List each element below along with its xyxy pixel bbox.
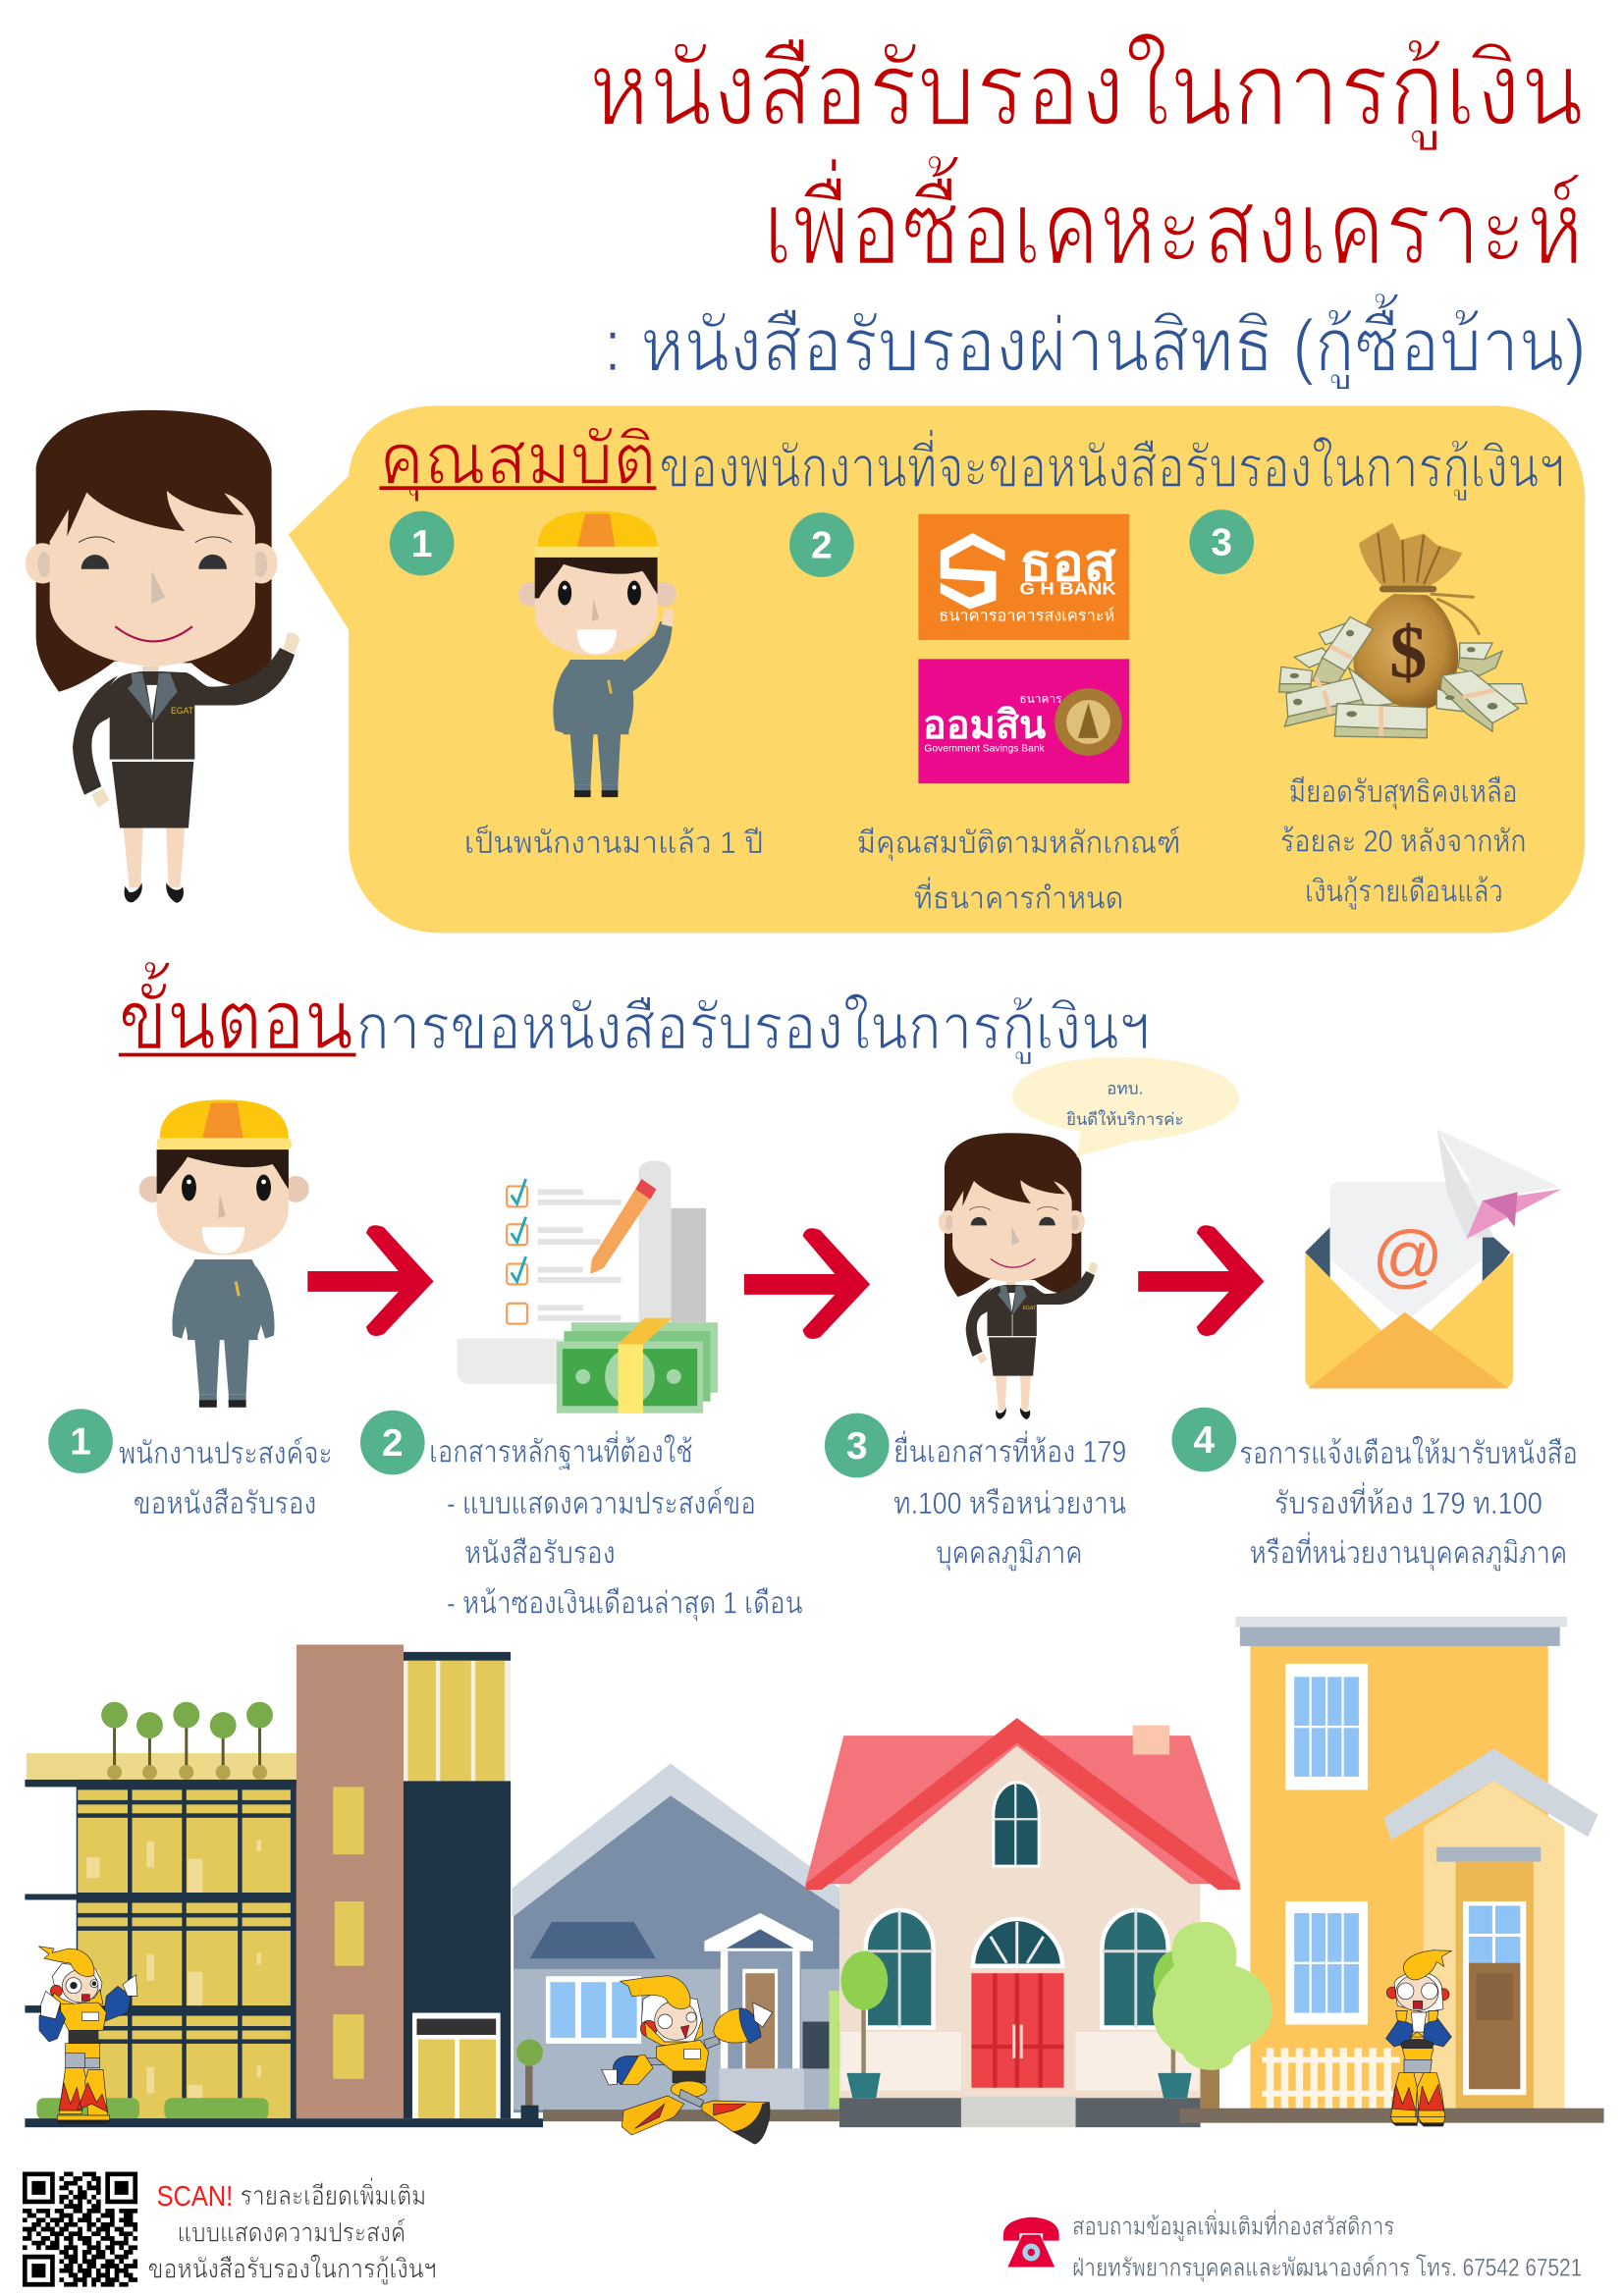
number badge 3: 3 (1211, 521, 1232, 563)
icon: worker waving (518, 511, 676, 797)
mascot left (38, 1947, 137, 2123)
step 3 (825, 1414, 1126, 1573)
text: criterion 2 (857, 826, 1180, 916)
text: criterion 3 (1280, 774, 1527, 909)
text: criterion 2: มีคุณสมบัติตามหลักเกณฑ์ (857, 826, 1180, 862)
step 4: รับรองที่ห้อง 179 ท.100 (1274, 1481, 1542, 1521)
mascot right (1386, 1950, 1451, 2126)
step 3: ยื่นเอกสารที่ห้อง 179 (893, 1430, 1126, 1469)
panel: qualifications (289, 405, 1585, 933)
arrow 2 (744, 1228, 870, 1339)
step 3: บุคคลภูมิภาค (936, 1536, 1082, 1573)
step 2 (360, 1411, 803, 1622)
step 4: หรือที่หน่วยงานบุคคลภูมิภาค (1250, 1531, 1567, 1573)
text: scan prompt: รายละเอียดเพิ่มเติม (241, 2177, 426, 2211)
arrow 1 (307, 1225, 434, 1336)
text: criterion 1: เป็นพนักงานมาแล้ว 1 ปี (464, 824, 763, 860)
text: contact: สอบถามข้อมูลเพิ่มเติมที่กองสวัสดิการ (1072, 2210, 1394, 2242)
text: criterion 3: ร้อยละ 20 หลังจากหัก (1280, 825, 1527, 859)
text: scan prompt: SCAN! (157, 2181, 233, 2213)
logo: Government Savings Bank: ออมสิน (923, 703, 1047, 747)
heading: steps (119, 961, 1150, 1066)
text: criterion 2: ที่ธนาคารกำหนด (914, 877, 1123, 916)
logo: Government Savings Bank: Government Savings Bank (924, 743, 1045, 754)
text: criterion 3: มียอดรับสุทธิคงเหลือ (1289, 774, 1518, 811)
building: glass office (25, 1644, 543, 2127)
heading: steps: ขั้นตอน (119, 961, 353, 1066)
arrow 3 (1138, 1225, 1264, 1336)
icon: envelope and paper plane (1305, 1129, 1561, 1388)
step 2: เอกสารหลักฐานที่ต้องใช้ (429, 1430, 693, 1470)
step 2: - แบบแสดงความประสงค์ขอ (447, 1486, 756, 1521)
step 1 (48, 1409, 333, 1521)
building: yellow house (1153, 1617, 1604, 2123)
step 3: 3 (846, 1425, 868, 1468)
logo: Government Savings Bank (918, 659, 1129, 783)
number badge 1 (390, 511, 454, 575)
step 1: พนักงานประสงค์จะ (119, 1436, 333, 1470)
icon: documents and money (457, 1160, 718, 1414)
logo: GH Bank: G H BANK (1019, 579, 1116, 599)
logo: GH Bank: ธนาคารอาคารสงเคราะห์ (939, 607, 1114, 625)
step 2: 2 (382, 1422, 404, 1465)
title (589, 32, 1584, 287)
step 1: 1 (70, 1420, 91, 1463)
illustration: street of houses (25, 1617, 1604, 2144)
text: scan prompt: ขอหนังสือรับรองในการกู้เงินฯ (148, 2254, 437, 2285)
building: grey house (513, 1763, 839, 2121)
text: scan prompt (148, 2177, 437, 2285)
speech bubble (1012, 1057, 1239, 1157)
number badge 2: 2 (811, 524, 833, 566)
building: red roof house (806, 1718, 1240, 2127)
heading: qualifications (379, 420, 1564, 502)
number badge 3 (1189, 509, 1254, 574)
heading: qualifications: คุณสมบัติ (379, 420, 656, 502)
number badge 2 (789, 512, 854, 577)
text: contact (1072, 2210, 1582, 2282)
step 2: - หน้าซองเงินเดือนล่าสุด 1 เดือน (447, 1585, 803, 1622)
speech bubble: ยินดีให้บริการค่ะ (1066, 1109, 1183, 1129)
icon: money bag (1279, 523, 1527, 738)
logo: Government Savings Bank: ธนาคาร (1019, 692, 1062, 706)
speech panel background (289, 405, 1585, 933)
character: woman presenter (26, 410, 299, 903)
speech bubble: อทบ. (1107, 1078, 1143, 1097)
character: woman service (939, 1133, 1098, 1419)
icon: worker step 1 (139, 1099, 309, 1408)
logo: GH Bank (918, 514, 1129, 640)
buildings row (25, 1617, 1604, 2127)
number badge 1: 1 (411, 523, 432, 565)
text: criterion 3: เงินกู้รายเดือนแล้ว (1305, 874, 1503, 909)
icon: money bag: $ (1389, 611, 1428, 694)
text: scan prompt: แบบแสดงความประสงค์ (178, 2217, 406, 2247)
step 2: หนังสือรับรอง (464, 1536, 616, 1571)
icon: envelope and paper plane: @ (1372, 1217, 1443, 1296)
mascot centre running (602, 1976, 773, 2144)
step 1: ขอหนังสือรับรอง (134, 1486, 316, 1521)
step 3: ท.100 หรือหน่วยงาน (893, 1486, 1126, 1521)
icon: telephone (1003, 2217, 1059, 2267)
QR code (23, 2174, 137, 2284)
step 4 (1172, 1408, 1578, 1573)
step 4: 4 (1194, 1419, 1216, 1462)
heading: steps: การขอหนังสือรับรองในการกู้เงินฯ (356, 992, 1150, 1065)
logo: GH Bank: ธอส (1019, 535, 1116, 592)
